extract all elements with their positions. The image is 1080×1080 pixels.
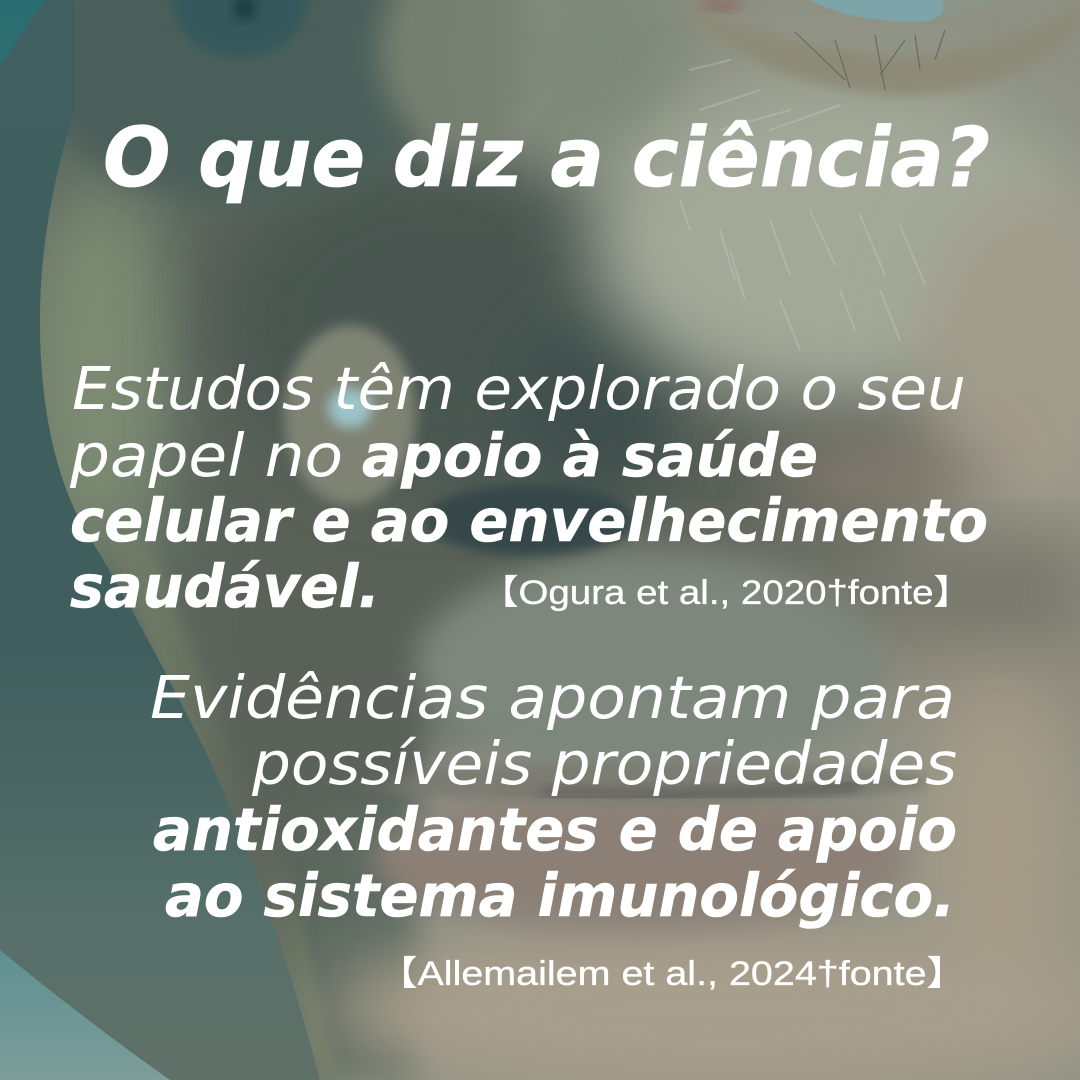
text block: first study: apoio à saúde xyxy=(362,421,818,490)
text block: second study: possíveis propriedades xyxy=(251,729,957,798)
icon: nostril shadow xyxy=(425,484,635,556)
text block: first study: papel no xyxy=(69,421,343,490)
text block: first study: celular e ao envelhecimento xyxy=(70,486,988,555)
text block: first study: saudável. xyxy=(70,552,380,621)
text block: second study: ao sistema imunológico. xyxy=(165,861,955,930)
icon: nose tip with highlight xyxy=(284,325,416,505)
skin texture highlights xyxy=(680,60,925,350)
text block: second study: Evidências apontam para xyxy=(150,663,955,732)
citation: Ogura: 【Ogura et al., 2020†fonte】 xyxy=(480,574,972,612)
icon: left eye iris xyxy=(172,0,308,58)
text block: first study: Estudos têm explorado o seu xyxy=(72,354,966,423)
title: O que diz a ciência? xyxy=(103,111,990,206)
text block: first study xyxy=(69,354,988,621)
text block: second study xyxy=(150,663,957,930)
icon: right eye and lower lid xyxy=(690,0,1080,95)
text block: second study: antioxidantes e de apoio xyxy=(153,795,957,864)
citation: Allemailem: 【Allemailem et al., 2024†fonte】 xyxy=(378,955,966,993)
